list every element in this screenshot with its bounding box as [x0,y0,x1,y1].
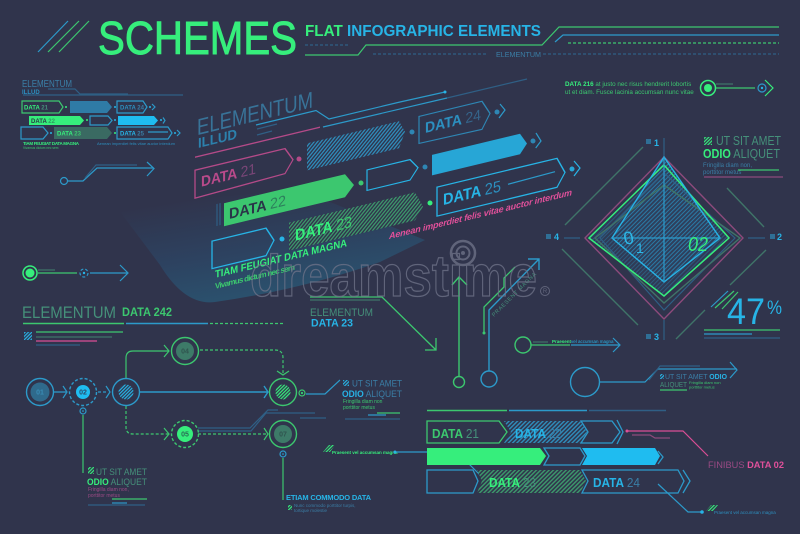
text block: ut sit amet top right: porttitor metus [703,170,741,176]
bar row 3 [427,470,690,493]
radar axis labels: 3 [654,332,659,342]
bar row 2 [427,448,663,465]
panel: big blue circle arrow [570,362,737,396]
small row 1 [22,101,155,113]
arrow: vertical green [452,277,467,388]
panel: small data tags [21,79,183,184]
tilted captions: TIAM FEUGIAT DATA MAGNA [215,237,347,281]
node 02: 02 [79,390,87,396]
callout: finibus data 02: FINIBUS DATA 02 [708,460,784,470]
text block: ut sit amet top right: Fringilla diam non, [703,163,752,169]
bar row 1: DATA 21 [432,426,479,441]
tilted connector lines [256,79,527,135]
node 01 [26,378,54,406]
panel: bottom bar chart [427,410,690,493]
tag: data 23: DATA 23 [295,213,352,245]
small row 3: DATA 23 [57,130,81,138]
node 04 [172,338,198,364]
radar axis labels [546,138,782,342]
small captions: Vivamus dictum nec sem [23,146,59,150]
icon: node connector [700,80,773,96]
panel: tilted data tags [195,25,580,296]
bar row 3: DATA 24 [593,475,640,490]
tilted dots and chevrons [280,104,580,242]
small row 1: DATA 24 [120,104,144,112]
tag: solid blue [432,132,527,175]
text block: etiam commodo [286,493,372,513]
panel: big blue circle arrow: Fringilla diam non [689,380,721,385]
pink rule [195,127,320,157]
text block: ut sit amet lower left: Fringilla diam non, [88,487,129,493]
title: SCHEMES [98,12,297,64]
flow chart heading: DATA 242 [122,307,172,319]
node 05 [172,420,198,448]
arrow: small circuit arrow [60,162,154,184]
subtitle: FLAT INFOGRAPHIC ELEMENTS [305,23,541,40]
panel: green circle arrow [515,337,620,353]
tag: hatched 1 [307,120,405,170]
panel: big blue circle arrow: UT SIT AMET ODIO [665,374,728,381]
text block: ut sit amet center [342,378,402,419]
tilted captions: Aenean imperdiet felis vitae auctor interdum [388,187,572,241]
panel: green circle arrow: Praesent [552,339,572,344]
radar axis labels: 2 [777,232,782,242]
panel: left node connector [23,265,128,281]
tag: data 22 [217,171,354,228]
node 06 [270,378,296,406]
tag: data 23 [289,190,423,251]
small row 1: DATA 21 [24,104,48,112]
teal glow shape behind tilted panel [115,190,425,302]
note text: ut et diam. Fusce lacinia accumsan nunc vitae [565,89,694,96]
header [38,12,779,64]
bar row 3: DATA 23 [489,475,536,490]
panel: big blue circle arrow: ALIQUET [660,380,687,389]
node 07 [270,420,296,448]
tilted connector line [508,172,555,184]
panel: green circle arrow: vel accumsan magna [571,339,614,344]
node 01: 01 [36,390,44,396]
panel: radar chart [546,138,782,342]
text block: etiam commodo: tortique molestie [294,508,328,513]
tag: outline left [212,226,274,269]
radar axis labels: 4 [554,232,559,242]
callout: finibus data 02 [626,430,784,470]
connector from node 02 [80,408,86,473]
node 03 [112,378,140,406]
bar rule lines [427,410,507,412]
note text: DATA 216 at justo nec risus hendrerit lobortis [565,81,691,88]
radar axes [564,138,765,340]
tilted heading: ELEMENTUM [197,87,313,140]
flow chart legend lines [24,332,123,345]
tilted captions: Vivamus dictum nec sem [215,263,295,291]
radar series labels: 0 [622,227,636,249]
text block: ut sit amet lower left: ODIO ALIQUET [87,477,147,488]
text block: ut sit amet lower left: porttitor metus [88,493,120,499]
flow chart heading: ELEMENTUM [22,303,116,322]
callout: praesent bottom right: Praesent vel accumsan magna [714,510,776,515]
small row 2: DATA 22 [31,118,55,125]
radar series labels: 02 [688,234,708,256]
panel: elementum data 23 arrow: DATA 23 [311,318,353,330]
radar series labels: 1 [636,240,644,256]
tilted captions [215,183,572,291]
header label: ELEMENTUM [496,52,541,59]
watermark: dreamstime [250,244,537,309]
header rule lines [305,27,779,55]
small row 2 [29,116,165,125]
node 04: 04 [181,348,189,356]
text block: ut sit amet center: porttitor metus [343,405,375,411]
bar row 1 [427,420,623,444]
radar outer frame lines [562,147,766,339]
radar series [585,157,743,319]
flow connectors [54,345,326,440]
node 02 [70,378,96,406]
stat: 47 percent [704,291,782,338]
callout: praesent green to bars: Praesent vel accumsan magna [332,450,398,455]
connector to right block [299,380,340,396]
connector from node 07 [280,451,286,500]
callout: praesent green to bars [323,445,488,483]
bar row 1: DATA 22 [515,426,562,441]
tag: data 24 [419,99,490,144]
radar series labels [622,227,708,256]
tag: data 25: DATA 25 [443,177,501,209]
watermark: R [543,289,548,295]
tag: data 21: DATA 21 [201,161,256,191]
small panel heading [22,79,183,96]
tag: data 24: DATA 24 [425,107,481,137]
note text [565,81,694,96]
small panel heading: ILLUD [22,90,40,96]
tag: outline blue [367,158,418,190]
tilted heading: ILLUD [198,127,237,152]
panel: top right data note [565,80,773,96]
text block: ut sit amet center: ODIO ALIQUET [342,389,402,400]
node 05: 05 [181,432,189,438]
tag: data 21 [195,147,293,198]
arrow: green step [482,267,515,334]
small row 3 [21,127,180,139]
text block: ut sit amet top right: UT SIT AMET [716,134,781,148]
panel: elementum data 23 arrow: ELEMENTUM [310,307,373,319]
text block: etiam commodo: ETIAM COMMODO DATA [286,493,372,502]
stat: 47 percent: 47 [727,291,765,332]
small captions: TIAM FEUGIAT DATA MAGNA [23,141,80,146]
small captions [23,141,176,150]
text block: ut sit amet center: UT SIT AMET [352,378,402,390]
tilted heading [197,87,313,152]
callout: praesent bottom right [658,484,776,515]
text block: ut sit amet top right [703,134,783,177]
node 07: 07 [279,432,287,438]
arrow: blue diagonal [481,259,539,387]
text block: ut sit amet lower left [87,467,147,505]
tilted tags group [195,25,572,296]
text block: ut sit amet lower left: UT SIT AMET [96,467,147,478]
tag: data 25 [437,156,565,216]
small row 3: DATA 25 [120,130,144,138]
rotated label: PRAESENT MAGNA [491,272,538,318]
panel: elementum data 23 arrow [310,297,436,350]
text block: etiam commodo: Nunc commodo porttitor turpis, [294,503,356,508]
panel: flow chart [22,303,340,500]
flow chart heading [22,303,283,324]
text block: ut sit amet top right: ODIO ALIQUET [703,147,780,161]
small panel heading: ELEMENTUM [22,79,72,90]
stat: 47 percent: % [767,298,782,319]
radar axis labels: 1 [654,138,659,148]
icon: title slashes [38,21,89,52]
panel: big blue circle arrow: porttitor metus [689,384,715,390]
tag: data 22: DATA 22 [229,193,286,223]
small captions: Aenean imperdiet felis vitae auctor interdum [97,141,176,146]
text block: ut sit amet center: Fringilla diam non [343,399,383,405]
